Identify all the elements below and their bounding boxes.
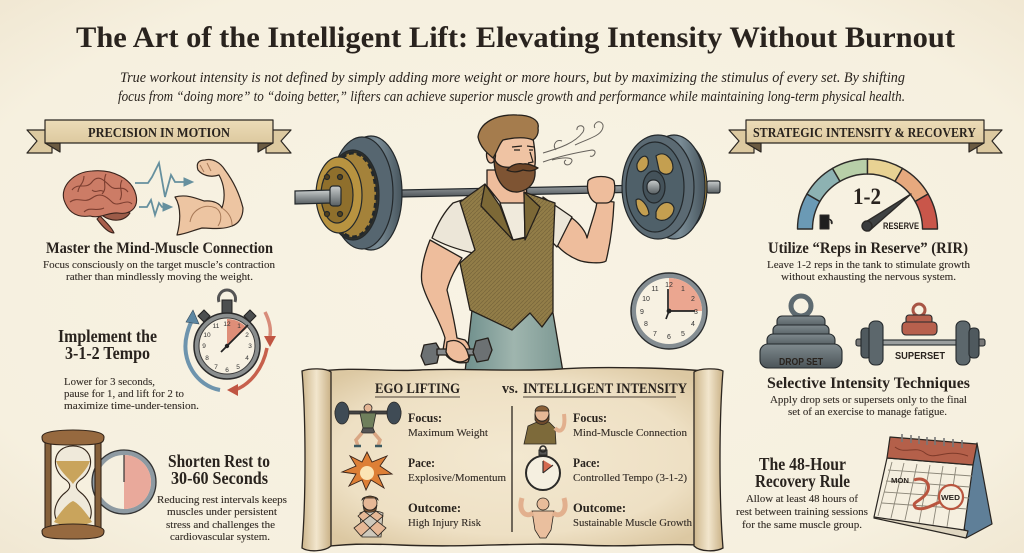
barbell: [295, 135, 720, 250]
icon: calendar: WED: [941, 493, 961, 502]
icon: stopwatch with arrows: 1: [237, 323, 241, 330]
icon: flexed arm: [175, 159, 243, 235]
left arm: [421, 240, 470, 363]
hair: [478, 115, 538, 158]
text: reps in reserve: Leave 1-2 reps in the tank to stimulate growth: [767, 259, 970, 271]
icon: breath swirls: [543, 122, 603, 165]
heading: selective intensity: Selective Intensity Techniques: [767, 375, 970, 392]
right roll: [694, 369, 723, 551]
intro text: True workout intensity is not defined by simply adding more weight or more hours, but by maximizing the stimulus of every set. By shifting: [120, 70, 905, 86]
icon: stopwatch with arrows: [185, 290, 276, 396]
text: rest: cardiovascular system.: [170, 531, 270, 543]
shirt: [500, 203, 527, 240]
icon: calendar: MON: [891, 476, 909, 485]
icon: wall clock: 6: [667, 334, 671, 341]
text: selective intensity: Apply drop sets or supersets only to the final: [770, 394, 967, 406]
moustache: [507, 164, 538, 172]
vest: [460, 184, 555, 330]
comparison: ego lifting: Maximum Weight: [408, 427, 488, 439]
heading: tempo: 3-1-2 Tempo: [65, 343, 150, 363]
icon: flexing figure: [521, 498, 565, 538]
right arm: [556, 200, 614, 263]
scroll header: EGO LIFTING: [375, 381, 460, 397]
icon: stopwatch with arrows: 5: [236, 364, 240, 371]
icon: stopwatch with arrows: 8: [205, 355, 209, 362]
icon: stopwatch with arrows: 12: [223, 321, 231, 328]
ear: [486, 147, 496, 163]
text: recovery rule: Allow at least 48 hours of: [746, 493, 858, 505]
comparison: ego lifting: High Injury Risk: [408, 517, 481, 529]
column divider: [511, 406, 513, 532]
eyes and nose: [512, 146, 534, 163]
icon: injured lifter: [354, 496, 386, 537]
text: selective intensity: [770, 394, 967, 418]
icon: stopwatch with arrows: 6: [225, 367, 229, 374]
left roll: [302, 369, 331, 551]
right plates: [622, 135, 720, 239]
banner: strategic intensity: [729, 120, 1002, 153]
icon: heavy squat: [335, 402, 401, 446]
icon: superset dumbbell: SUPERSET: [895, 351, 945, 362]
comparison: intelligent intensity: Controlled Tempo (3-1-2): [573, 472, 687, 484]
icon: brain: [63, 171, 137, 233]
panel: comparison scroll: [302, 368, 723, 551]
heading: recovery rule: The 48-Hour: [759, 454, 846, 474]
heading: rest: Shorten Rest to: [168, 451, 270, 471]
left end sleeve: [295, 186, 341, 206]
neck: [487, 170, 527, 206]
lapels: [481, 184, 540, 240]
scroll header: [375, 381, 687, 397]
icon: wall clock: 5: [681, 331, 685, 338]
text: mind-muscle: [43, 259, 275, 283]
text: tempo: pause for 1, and lift for 2 to: [64, 388, 184, 400]
icon: drop set stack: [760, 296, 842, 368]
text: selective intensity: set of an exercise to manage fatigue.: [788, 406, 947, 418]
heading: rest: 30-60 Seconds: [171, 468, 268, 488]
text: tempo: maximize time-under-tension.: [64, 400, 199, 412]
text: mind-muscle: Focus consciously on the target muscle’s contraction: [43, 259, 275, 271]
icon: drop set stack: DROP SET: [779, 357, 823, 368]
figure: lifter: [421, 115, 615, 372]
icon: wall clock: [631, 273, 707, 349]
icon: explosion: [342, 452, 392, 490]
icon: wall clock: 3: [694, 309, 698, 316]
heading: tempo: Implement the: [58, 326, 157, 346]
panel: strategic intensity and recovery: [729, 120, 1002, 538]
right sleeve: [543, 197, 572, 247]
parchment: [310, 368, 715, 546]
text: recovery rule: [736, 493, 868, 531]
icon: stopwatch with arrows: 7: [214, 364, 218, 371]
heading: mind-muscle: Master the Mind-Muscle Connection: [46, 240, 273, 257]
heading: tempo: [58, 326, 157, 363]
trousers: [465, 310, 563, 372]
text: rest: Reducing rest intervals keeps: [157, 494, 287, 506]
heading: recovery rule: Recovery Rule: [755, 471, 850, 491]
text: tempo: Lower for 3 seconds,: [64, 376, 155, 388]
icon: stopwatch with arrows: 9: [202, 343, 206, 350]
icon: wall clock: 9: [640, 309, 644, 316]
heading: rest: [168, 451, 270, 488]
banner: precision in motion: PRECISION IN MOTION: [88, 126, 230, 141]
comparison: intelligent intensity: Sustainable Muscle Growth: [573, 517, 692, 529]
gauge label: RESERVE: [883, 221, 919, 231]
icon: tempo stopwatch: [526, 446, 560, 490]
icon: wall clock: 4: [691, 321, 695, 328]
text: rest: stress and challenges the: [166, 519, 275, 531]
comparison: intelligent intensity: Pace:: [573, 455, 600, 470]
icon: wall clock: 12: [665, 282, 673, 289]
icon: wall clock: 10: [642, 296, 650, 303]
comparison: ego lifting: Pace:: [408, 455, 435, 470]
comparison: ego lifting: Focus:: [408, 410, 442, 425]
icon: hourglass: [42, 430, 104, 539]
intro text: focus from “doing more” to “doing better,” lifters can achieve superior muscle growth and performance while maintaining long-term physical health.: [118, 89, 905, 105]
icon: rest clock: [92, 450, 156, 514]
text: mind-muscle: rather than mindlessly moving the weight.: [66, 271, 253, 283]
icon: stopwatch with arrows: 11: [213, 323, 220, 330]
text: reps in reserve: [767, 259, 970, 283]
title: The Art of the Intelligent Lift: Elevating Intensity Without Burnout: [76, 21, 955, 54]
icon: stopwatch with arrows: 2: [245, 332, 249, 339]
text: tempo: [64, 376, 199, 412]
icon: wall clock: 7: [653, 331, 657, 338]
icon: calendar: [874, 434, 992, 538]
text: rest: muscles under persistent: [167, 506, 277, 518]
icon: reps in reserve gauge: [798, 159, 938, 231]
comparison: ego lifting: Outcome:: [408, 500, 461, 515]
comparison: intelligent intensity: Mind-Muscle Connection: [573, 427, 687, 439]
left plates: [316, 136, 402, 250]
icon: stopwatch with arrows: 4: [245, 355, 249, 362]
text: recovery rule: rest between training sessions: [736, 506, 868, 518]
comparison: ego lifting: Explosive/Momentum: [408, 472, 506, 484]
comparison: ego lifting: [408, 410, 506, 529]
heading: reps in reserve: Utilize “Reps in Reserve” (RIR): [768, 240, 968, 257]
icon: stopwatch with arrows: 10: [203, 332, 211, 339]
panel: precision in motion: [27, 120, 291, 543]
beard: [494, 158, 535, 192]
left sleeve: [432, 200, 477, 253]
dumbbell: [421, 338, 492, 365]
face: [494, 127, 535, 172]
banner: strategic intensity: STRATEGIC INTENSITY & RECOVERY: [753, 126, 976, 141]
text: rest: [157, 494, 287, 543]
icon: stopwatch with arrows: 3: [248, 343, 252, 350]
comparison: intelligent intensity: Focus:: [573, 410, 607, 425]
hand gripping bar: [587, 176, 615, 203]
comparison: intelligent intensity: [573, 410, 692, 529]
icon: wall clock: 8: [644, 321, 648, 328]
icon: wall clock: 2: [691, 296, 695, 303]
icon: nerve signal arrows: [135, 163, 193, 215]
gauge value: 1-2: [853, 184, 881, 209]
icon: wall clock: 1: [681, 286, 685, 293]
scroll header: vs.: [502, 381, 518, 397]
scroll header: INTELLIGENT INTENSITY: [523, 381, 687, 397]
icon: lifter in vest: [524, 406, 564, 444]
heading: recovery rule: [755, 454, 850, 491]
icon: wall clock: 11: [651, 286, 659, 293]
text: reps in reserve: without exhausting the nervous system.: [781, 271, 956, 283]
icon: superset dumbbell: [856, 304, 985, 365]
text: recovery rule: for the same muscle group.: [742, 519, 862, 531]
comparison: intelligent intensity: Outcome:: [573, 500, 626, 515]
bar: [400, 185, 650, 197]
intro text: [118, 70, 905, 105]
banner: precision in motion: [27, 120, 291, 153]
